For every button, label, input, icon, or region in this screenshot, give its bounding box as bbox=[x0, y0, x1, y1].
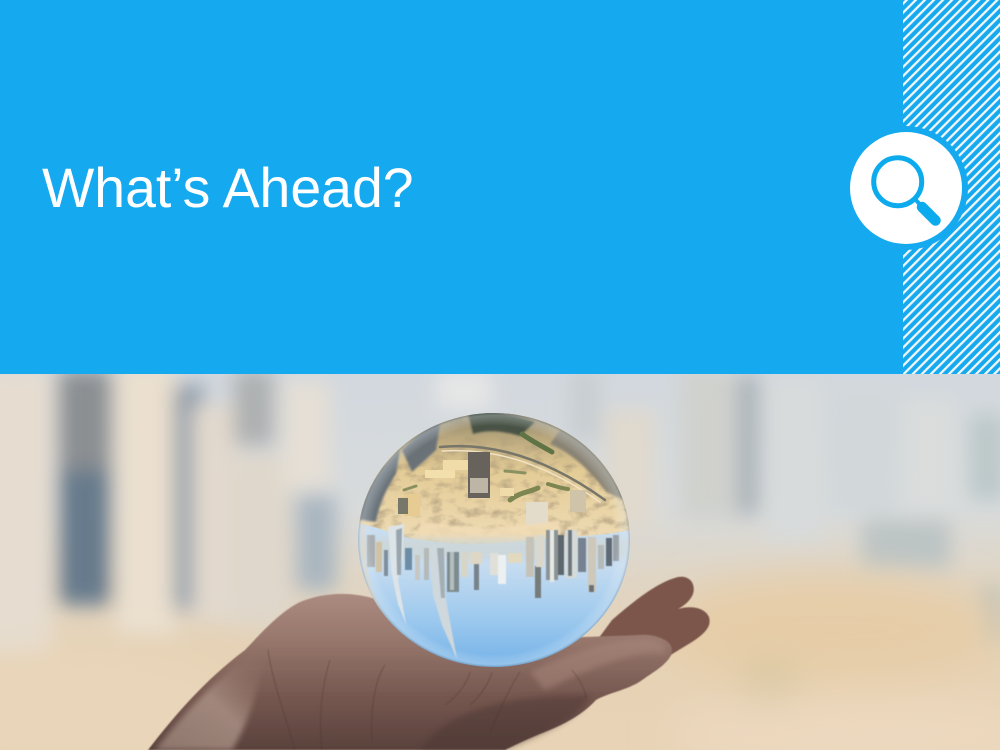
icon: magnifying glass bbox=[874, 158, 936, 220]
sphere body: sky bbox=[358, 413, 630, 667]
hanging skyline bbox=[367, 524, 619, 659]
crystal ball bbox=[358, 413, 630, 667]
road and greenery bbox=[404, 434, 605, 502]
header panel bbox=[0, 0, 1000, 374]
photo: blurred city background bbox=[0, 365, 1000, 750]
haze at horizon bbox=[358, 538, 630, 558]
badge ring bbox=[844, 126, 968, 250]
glass shading bbox=[358, 413, 630, 667]
upside-down ground bbox=[359, 413, 630, 544]
city texture bbox=[370, 416, 629, 538]
thumb highlight bbox=[530, 638, 665, 690]
palm creases bbox=[268, 650, 586, 750]
wrist highlight bbox=[155, 670, 256, 750]
badge circle bbox=[850, 132, 962, 244]
central tower bbox=[468, 452, 490, 498]
bright city band bbox=[420, 520, 560, 543]
striped band bbox=[903, 0, 1000, 374]
palm and wrist bbox=[148, 594, 672, 750]
hand bbox=[148, 577, 710, 750]
palm shadow bbox=[420, 695, 590, 750]
title: What’s Ahead? bbox=[42, 157, 414, 219]
dark rim of the city bbox=[360, 412, 624, 522]
back fingers bbox=[599, 576, 710, 656]
